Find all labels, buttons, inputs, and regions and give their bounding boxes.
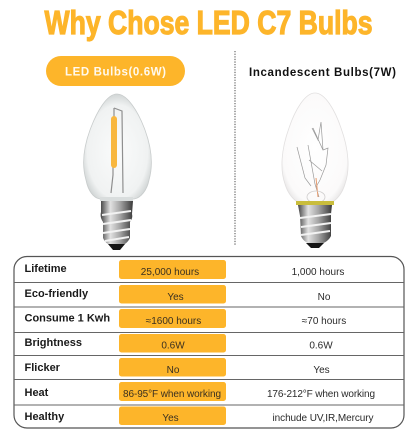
row: consume 1 kwh: ≈1600 hours [146,316,201,327]
row: consume 1 kwh [24,309,346,328]
row: heat: 86-95°F when working [123,389,221,400]
row: heat [24,382,375,401]
row: heat: Heat [24,387,49,399]
row: healthy [24,406,374,425]
row: lifetime: 25,000 hours [141,267,199,278]
row: flicker: Yes [313,365,330,376]
row: eco-friendly: No [318,292,331,303]
row: brightness: 0.6W [309,340,333,352]
row: lifetime: 1,000 hours [292,267,344,278]
row: heat: 176-212°F when working [267,389,375,400]
row: eco-friendly: Eco-friendly [24,288,89,300]
row: brightness: Brightness [24,337,82,349]
icon: LED bulb [84,94,151,250]
row: brightness: 0.6W [161,340,185,352]
row: consume 1 kwh: ≈70 hours [302,316,346,327]
icon: incandescent bulb [282,93,348,248]
row: healthy: Healthy [24,411,65,423]
row: healthy: inchude UV,IR,Mercury [272,413,374,424]
badge: LED bulbs [46,56,185,86]
row: lifetime: Lifetime [24,263,67,275]
row: flicker [24,358,330,376]
row: flicker: No [167,365,180,376]
badge: LED bulbs: LED Bulbs(0.6W) [65,66,166,78]
heading: incandescent bulbs: Incandescent Bulbs(7W) [249,67,396,79]
comparison table [14,256,404,428]
row: consume 1 kwh: Consume 1 Kwh [24,312,110,324]
row: brightness [24,334,333,352]
row: flicker: Flicker [24,362,61,374]
row: lifetime [24,260,344,279]
row: healthy: Yes [162,413,179,424]
row: eco-friendly: Yes [167,292,184,303]
row: eco-friendly [24,285,331,304]
